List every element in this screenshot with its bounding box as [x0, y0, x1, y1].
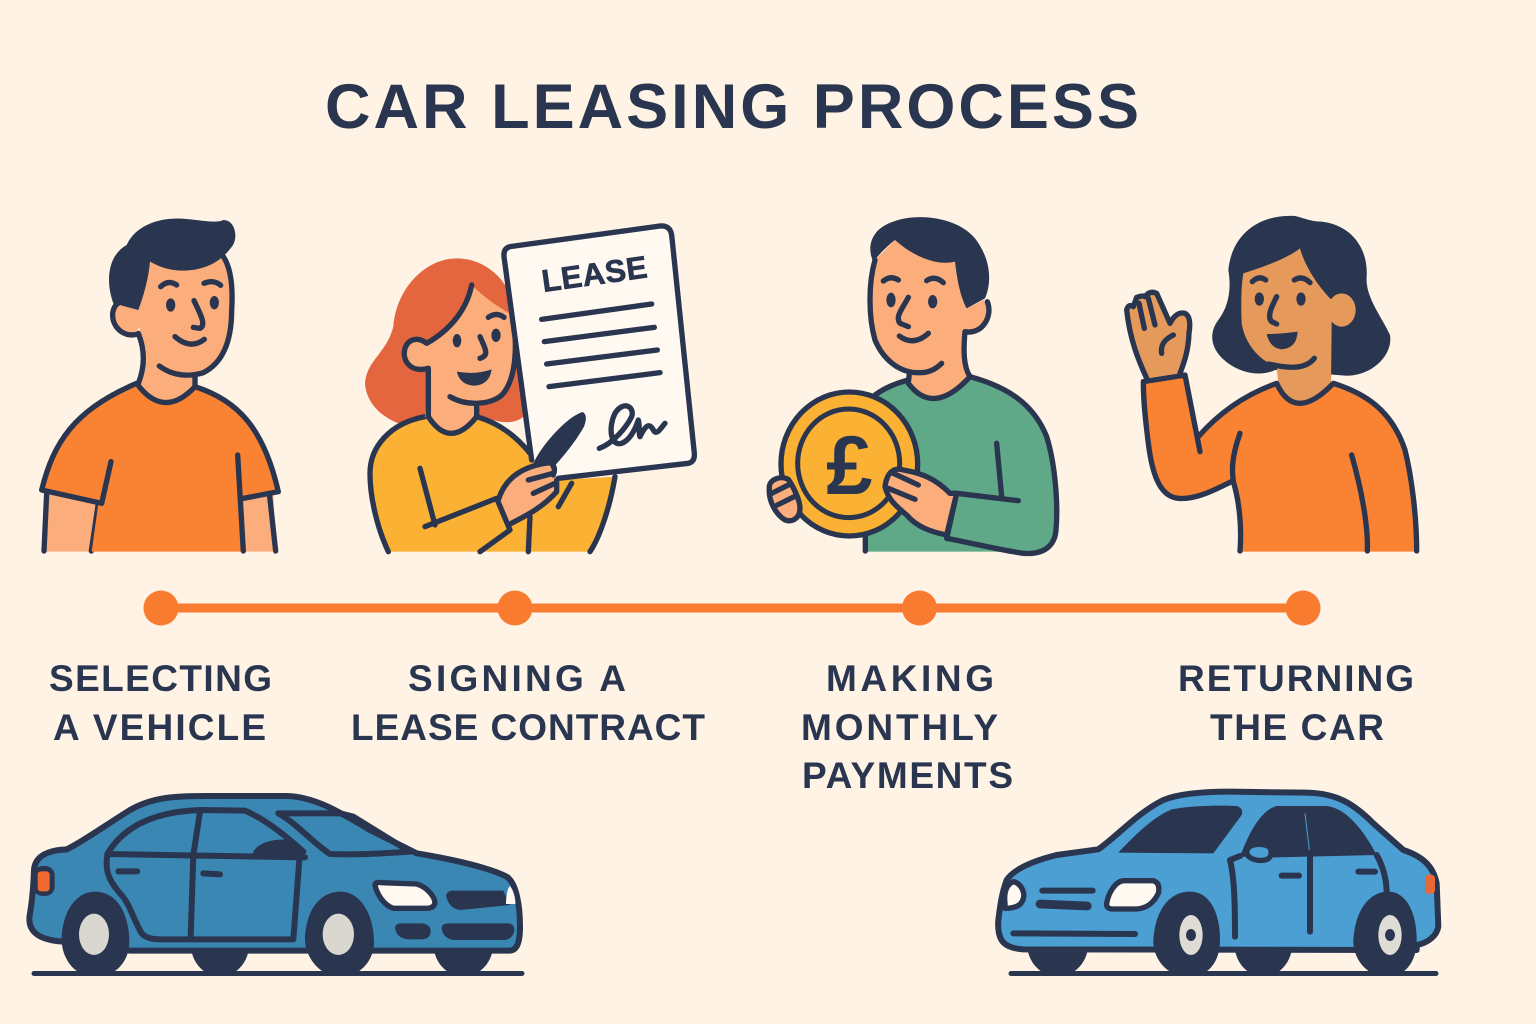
person: signing a lease contract — [365, 226, 694, 552]
lease document — [504, 226, 694, 478]
timeline — [144, 590, 1320, 626]
ground line: left car — [34, 971, 522, 976]
label: making monthly payments: MONTHLY — [801, 707, 998, 748]
car: light blue hatchback — [998, 792, 1438, 977]
person: returning the car — [1127, 216, 1417, 552]
icon: pound coin: £ — [826, 419, 873, 512]
label: selecting a vehicle — [49, 658, 272, 748]
label: signing a lease contract: SIGNING A — [408, 658, 626, 699]
label: signing a lease contract — [351, 658, 705, 748]
icon: pound coin — [781, 392, 918, 536]
label: returning the car: THE CAR — [1210, 707, 1384, 748]
label: signing a lease contract: LEASE CONTRACT — [351, 707, 705, 748]
label: making monthly payments — [801, 658, 1013, 796]
car: dark blue sedan — [29, 796, 520, 977]
label: returning the car — [1178, 658, 1414, 748]
person: making monthly payments — [769, 217, 1057, 553]
label: making monthly payments: MAKING — [826, 658, 994, 699]
label: making monthly payments: PAYMENTS — [802, 755, 1013, 796]
person: selecting a vehicle — [42, 219, 278, 552]
lease document: LEASE — [539, 250, 649, 299]
label: returning the car: RETURNING — [1178, 658, 1414, 699]
label: selecting a vehicle: A VEHICLE — [53, 707, 266, 748]
label: selecting a vehicle: SELECTING — [49, 658, 272, 699]
ground line: right car — [1011, 971, 1436, 976]
title: CAR LEASING PROCESS — [325, 72, 1139, 142]
